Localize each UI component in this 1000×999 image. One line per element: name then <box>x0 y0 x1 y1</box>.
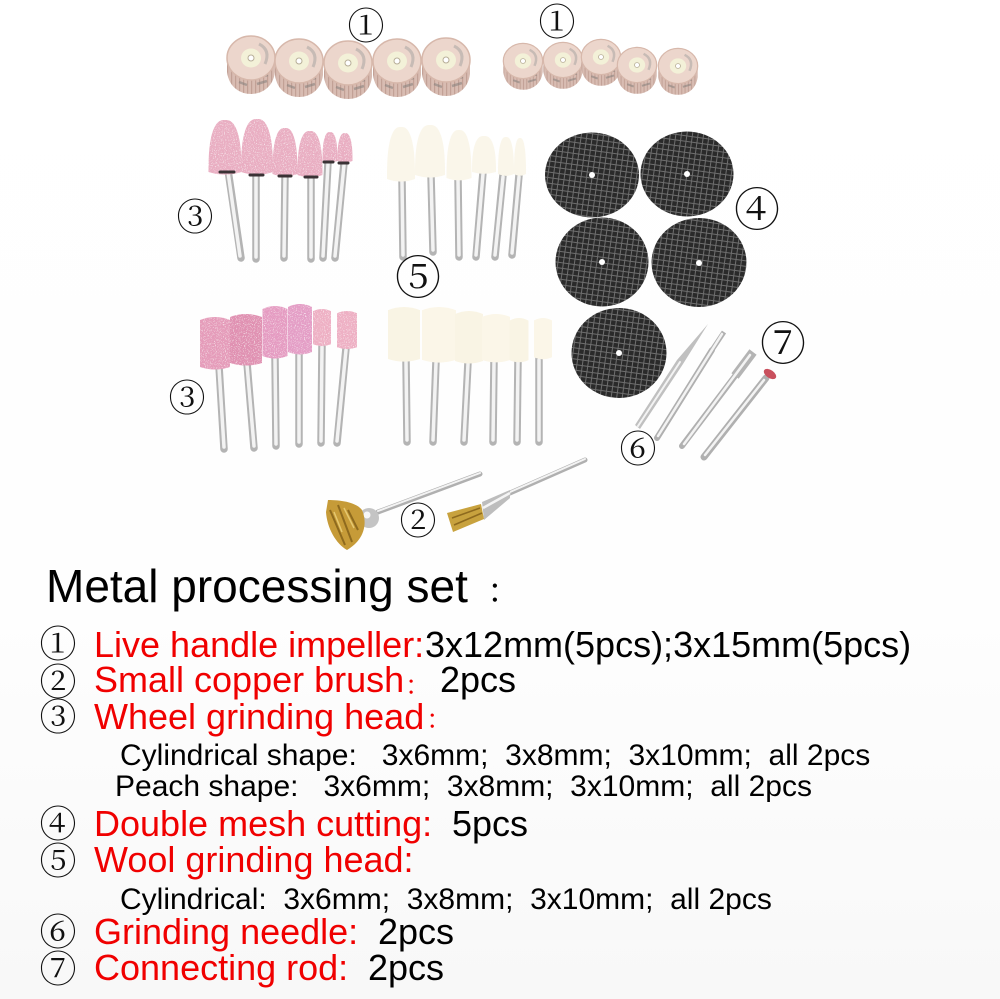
item 5 sizes: Cylindrical: 3x6mm; 3x8mm; 3x10mm; all 2pcs <box>120 883 772 916</box>
callout 2: ② <box>400 491 436 545</box>
item 3 peach sizes: Peach shape: 3x6mm; 3x8mm; 3x10mm; all 2pcs <box>115 770 812 803</box>
item 7: Connecting rod: <box>94 947 348 988</box>
callout 7: ⑦ <box>760 308 806 374</box>
photo callout numbers <box>168 0 806 545</box>
item 2: Small copper brush <box>94 659 404 700</box>
callout 4: ④ <box>734 174 780 240</box>
item 5 <box>40 831 414 885</box>
item 1 <box>40 614 911 668</box>
item 6: ⑥ <box>40 902 76 956</box>
item 3: Wheel grinding head： <box>94 696 443 737</box>
item 5: Wool grinding head: <box>94 839 414 880</box>
item 7: ⑦ <box>40 939 76 993</box>
callout 3 upper: ③ <box>176 187 214 241</box>
copper end brush <box>447 459 585 532</box>
copper cup brush <box>326 473 480 550</box>
pink cylindrical grinding heads <box>200 304 357 449</box>
item 3 cylindrical sizes: Cylindrical shape: 3x6mm; 3x8mm; 3x10mm; all 2pcs <box>120 739 870 772</box>
double mesh cutting discs <box>545 132 746 398</box>
red rubber tip <box>762 367 778 381</box>
item 4 <box>40 794 528 848</box>
pink peach grinding heads <box>208 119 352 259</box>
item 6 <box>40 902 454 956</box>
impellers 12mm <box>227 36 470 99</box>
white felt peach heads <box>387 125 526 257</box>
item 7 <box>40 939 444 993</box>
item 6: Grinding needle: <box>94 911 358 952</box>
impellers 15mm <box>503 39 698 95</box>
callout 5: ⑤ <box>395 242 441 308</box>
callout 3 lower: ③ <box>168 368 206 422</box>
item 6: 2pcs <box>378 911 454 952</box>
parts list <box>40 614 911 993</box>
callout 6: ⑥ <box>620 419 656 473</box>
item 2: 2pcs <box>440 659 516 700</box>
item 1: Live handle impeller: <box>94 624 424 665</box>
item 4: Double mesh cutting: <box>94 803 432 844</box>
grinding needles <box>635 324 724 438</box>
title: Metal processing set <box>46 560 468 612</box>
product photo <box>200 36 778 550</box>
item 4: ④ <box>40 794 76 848</box>
item 4: 5pcs <box>452 803 528 844</box>
item 2: ② <box>40 652 76 706</box>
item 7: 2pcs <box>368 947 444 988</box>
item 3: ③ <box>40 687 76 741</box>
item 3 <box>40 687 443 741</box>
white felt cylindrical heads <box>388 307 552 442</box>
item 2: ： <box>400 670 422 702</box>
item 1: ① <box>40 614 76 668</box>
item 2 <box>40 652 516 706</box>
item 5: ⑤ <box>40 831 76 885</box>
connecting rods <box>682 352 778 457</box>
title: ： <box>481 572 509 612</box>
item 1: 3x12mm(5pcs);3x15mm(5pcs) <box>425 624 911 665</box>
